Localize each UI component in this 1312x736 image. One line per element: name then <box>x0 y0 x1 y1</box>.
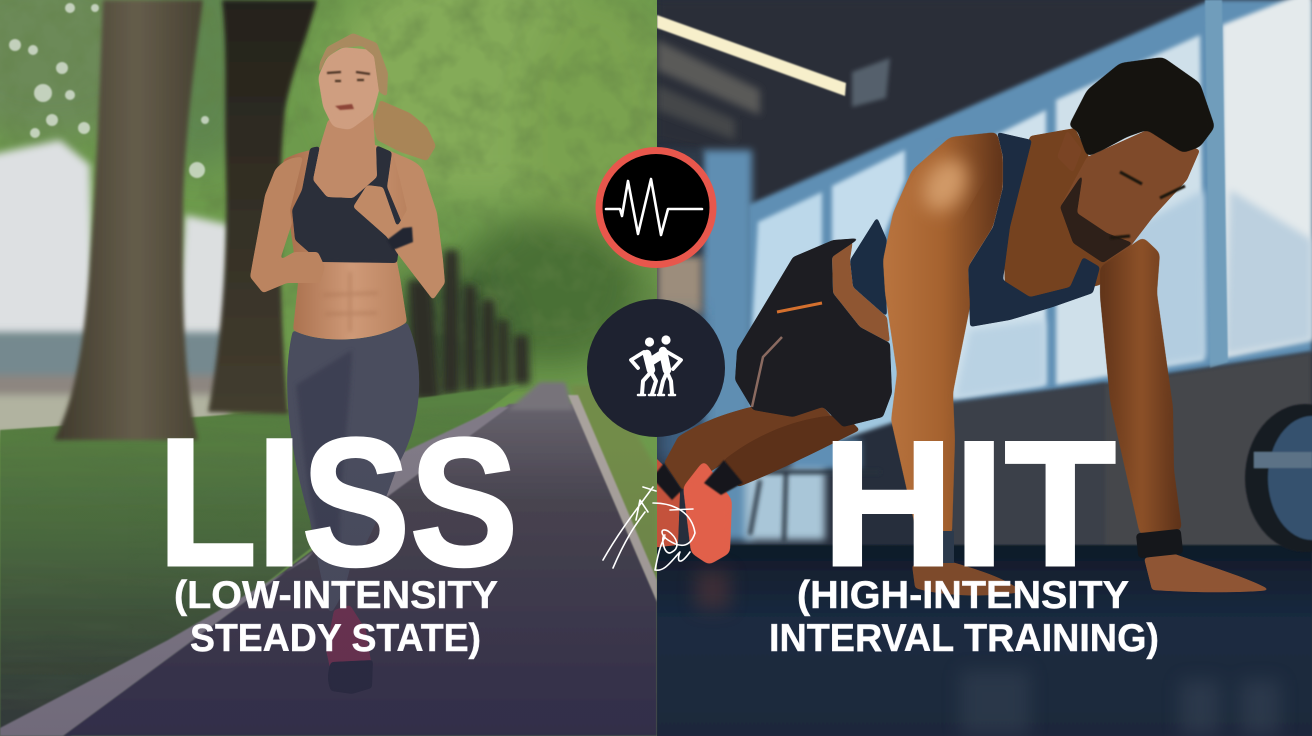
background: gym bench seen behind legs <box>745 440 860 540</box>
shorts <box>735 238 892 427</box>
midriff <box>832 240 890 343</box>
neck and chest <box>1003 128 1130 300</box>
leggings <box>287 322 419 612</box>
icon: heartbeat badge <box>599 150 713 264</box>
mouth <box>335 104 354 110</box>
wrist bands <box>1136 529 1183 558</box>
background: running path <box>63 404 657 736</box>
background: foliage texture <box>208 0 657 323</box>
torso skin <box>283 145 420 339</box>
running shoe <box>328 660 373 694</box>
background: weight plate <box>1245 404 1312 552</box>
facial features <box>327 72 370 81</box>
face <box>1060 130 1200 263</box>
background: distant tree row <box>408 250 530 400</box>
rear leg <box>664 398 835 490</box>
face <box>318 47 380 130</box>
shorts orange stripe <box>777 303 822 312</box>
background: path left kerb <box>0 407 509 736</box>
background: beige pillar <box>657 255 702 315</box>
background: distant path <box>508 382 574 410</box>
rear arm <box>1100 237 1182 535</box>
front lower leg <box>724 415 860 487</box>
rear sock <box>652 463 682 500</box>
front arm <box>883 132 1003 535</box>
background: ceiling fixture <box>852 58 890 107</box>
tank top <box>968 132 1100 327</box>
background: building seen through window <box>955 190 1312 398</box>
neck <box>313 110 377 198</box>
background: gym floor <box>657 545 1312 736</box>
red shoe rear <box>650 452 680 548</box>
heading: LISS: LISS <box>158 400 518 604</box>
red shoe front <box>683 460 732 565</box>
background: tree canopy <box>0 0 680 390</box>
tank back panel <box>850 217 887 317</box>
background: blue side wall <box>702 150 752 540</box>
background: window mullions <box>1205 0 1228 368</box>
lower leg and pink shoe upper <box>326 605 372 668</box>
background: floor reflections <box>695 570 1280 736</box>
ear <box>1057 130 1082 173</box>
heading: HIT: HIT <box>822 404 1116 603</box>
ponytail <box>373 100 436 161</box>
background: lower wall <box>1100 352 1312 550</box>
background: path right kerb <box>568 395 657 602</box>
front sock <box>704 460 743 495</box>
background: large tree trunk <box>54 0 203 440</box>
background: grass texture <box>0 385 520 736</box>
background: windows <box>750 0 1312 470</box>
shoulder highlight <box>914 151 976 219</box>
background: window frames <box>748 0 1312 445</box>
figure: woman jogging <box>250 33 445 694</box>
background: ceiling slats <box>657 40 760 140</box>
subheading: low-intensity steady state line 2: STEADY STATE) <box>190 617 481 660</box>
subheading: low-intensity steady state line 1: (LOW-INTENSITY <box>174 574 498 617</box>
hair top <box>317 33 388 97</box>
background: distant field and buildings <box>0 332 230 435</box>
viewer-right arm <box>353 153 445 300</box>
panel: LISS outdoor running scene <box>0 0 680 736</box>
rear hand <box>1144 553 1270 592</box>
eyes and mouth <box>1110 172 1185 238</box>
background: ceiling and upper wall <box>657 0 1312 220</box>
background: second tree trunk <box>208 0 317 414</box>
background: pale sky <box>0 140 232 345</box>
subheading: high-intensity interval training line 2: INTERVAL TRAINING) <box>769 617 1159 660</box>
legging seam shading <box>297 353 351 541</box>
icon: two figures badge <box>587 299 725 437</box>
wrist watch <box>387 227 413 250</box>
icon: handwritten signature <box>603 487 695 570</box>
front hand <box>912 562 1022 595</box>
background: grass <box>0 385 520 736</box>
figure: man doing plank <box>650 57 1270 595</box>
subheading: high-intensity interval training line 1: (HIGH-INTENSITY <box>797 574 1129 617</box>
shorts grey stripe <box>752 337 782 407</box>
abdominal shading <box>335 274 375 330</box>
hair <box>1068 57 1215 157</box>
beard <box>1060 173 1133 263</box>
background: right grass verge <box>573 386 656 576</box>
panel: HIT indoor gym scene <box>650 0 1312 736</box>
sports bra <box>292 145 402 263</box>
viewer-left arm <box>250 157 325 293</box>
background: bokeh highlights <box>9 3 209 178</box>
background: ceiling light tube <box>657 15 846 96</box>
